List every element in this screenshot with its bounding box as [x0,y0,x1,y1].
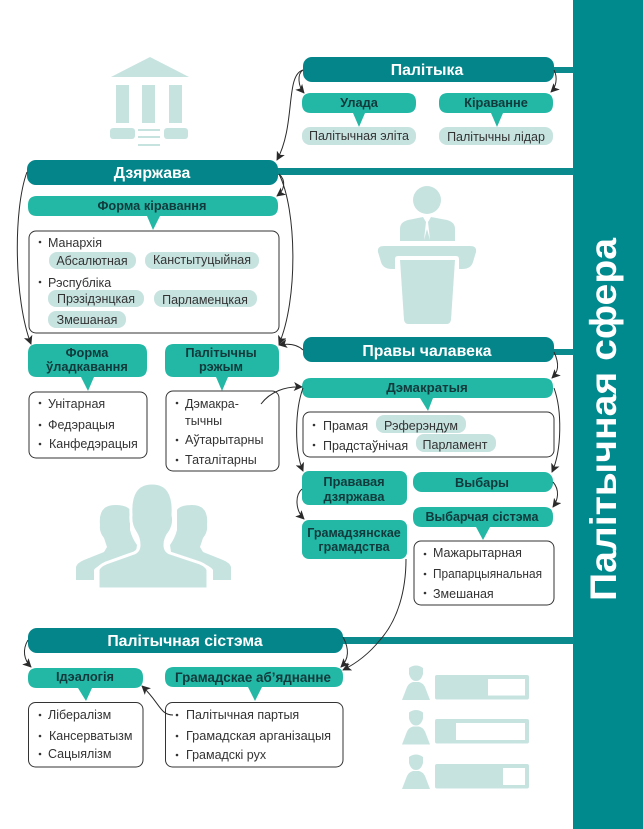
card: Кіраванне [439,93,553,145]
card: Выбары [413,472,553,492]
card: Палітычны рэжым: тычны [185,414,222,428]
card: Прававая дзяржава [302,471,407,505]
card: Палітычны рэжым: Таталітарны [185,453,257,467]
card: Палітычны рэжым: рэжым [199,359,243,374]
card: Форма ўладкавання: Унітарная [48,397,105,411]
icon: government building [110,57,189,146]
card: Дэмакратыя: Парламент [423,438,488,452]
card: Форма кіравання: Рэспубліка [48,276,111,290]
card: Форма кіравання: Манархія [48,236,102,250]
card: Форма ўладкавання: Форма [66,345,109,360]
card: Выбары: Выбары [455,475,509,490]
card: Улада: Палітычная эліта [309,129,409,143]
card: Палітычны рэжым: Палітычны [185,345,257,360]
card: Дэмакратыя: Прадстаўнічая [323,439,408,453]
section: Палітыка [303,57,554,82]
card: Дэмакратыя: Рэферэндум [384,419,458,433]
card: Кіраванне: Палітычны лідар [447,130,545,144]
section: Палітычная сістэма: Палітычная сістэма [107,633,263,650]
card: Форма кіравання: Форма кіравання [98,198,206,213]
card: Дэмакратыя: Дэмакратыя [386,380,468,395]
card: Выбарчая сістэма: Мажарытарная [433,546,522,560]
card: Улада: Улада [340,95,379,110]
icon: speaker at lectern [378,186,476,324]
section: Правы чалавека [303,337,554,362]
card: Форма ўладкавання: Канфедэрацыя [49,437,138,451]
card: Палітычны рэжым [165,344,279,471]
card: Грамадзянскае грамадства: грамадства [318,540,391,554]
card: Кіраванне: Кіраванне [464,95,528,110]
icon: group of people [76,483,231,589]
card: Грамадскае аб'яднанне: Грамадскі рух [186,748,267,762]
sidebar title: Палітычная сфера [583,238,624,601]
section: Правы чалавека: Правы чалавека [362,343,492,360]
card: Прававая дзяржава: дзяржава [324,489,385,504]
card: Форма кіравання: Парламенцкая [162,293,248,307]
card: Грамадскае аб'яднанне: Грамадская арганізацыя [186,729,331,743]
icon: person with bar 1 [402,666,529,700]
card: Выбарчая сістэма: Прапарцыянальная [433,567,542,581]
connector bars to sidebar [276,67,574,644]
arrows: flow connections [17,70,560,715]
card: Выбарчая сістэма: Выбарчая сістэма [426,510,540,524]
card: Ідэалогія [28,668,143,767]
card: Форма кіравання: Змешаная [57,313,117,327]
card: Выбарчая сістэма [413,507,554,605]
card: Ідэалогія: Кансерватызм [49,729,133,743]
card: Улада [302,93,416,145]
card: Ідэалогія: Лібералізм [48,708,111,722]
section: Дзяржава [27,160,278,185]
card: Форма кіравання [28,196,279,333]
card: Грамадскае аб'яднанне [165,667,343,767]
card: Форма ўладкавання [28,344,147,458]
card: Дэмакратыя [302,378,554,457]
card: Форма кіравання: Абсалютная [56,254,128,268]
card: Ідэалогія: Ідэалогія [56,669,114,684]
card: Выбарчая сістэма: Змешаная [433,587,494,601]
card: Палітычны рэжым: Аўтарытарны [185,433,263,447]
section: Дзяржава: Дзяржава [114,165,191,182]
card: Форма кіравання: Канстытуцыйная [153,253,251,267]
card: Палітычны рэжым: Дэмакра- [185,397,239,411]
card: Прававая дзяржава: Прававая [323,474,385,489]
card: Форма ўладкавання: ўладкавання [46,359,128,374]
card: Форма ўладкавання: Федэрацыя [48,418,115,432]
card: Грамадскае аб'яднанне: Палітычная партыя [186,708,299,722]
card: Грамадскае аб'яднанне: Грамадскае аб’яднанне [175,670,331,685]
section: Палітыка: Палітыка [391,62,463,79]
card: Грамадзянскае грамадства [302,520,407,559]
panel: right sidebar [573,0,643,829]
card: Дэмакратыя: Прамая [323,419,368,433]
icon: person with bar 3 [402,754,529,789]
card: Форма кіравання: Прэзідэнцкая [57,292,135,306]
card: Грамадзянскае грамадства: Грамадзянскае [307,526,401,540]
icon: person with bar 2 [402,710,529,744]
section: Палітычная сістэма [28,628,343,653]
card: Ідэалогія: Сацыялізм [48,747,111,761]
